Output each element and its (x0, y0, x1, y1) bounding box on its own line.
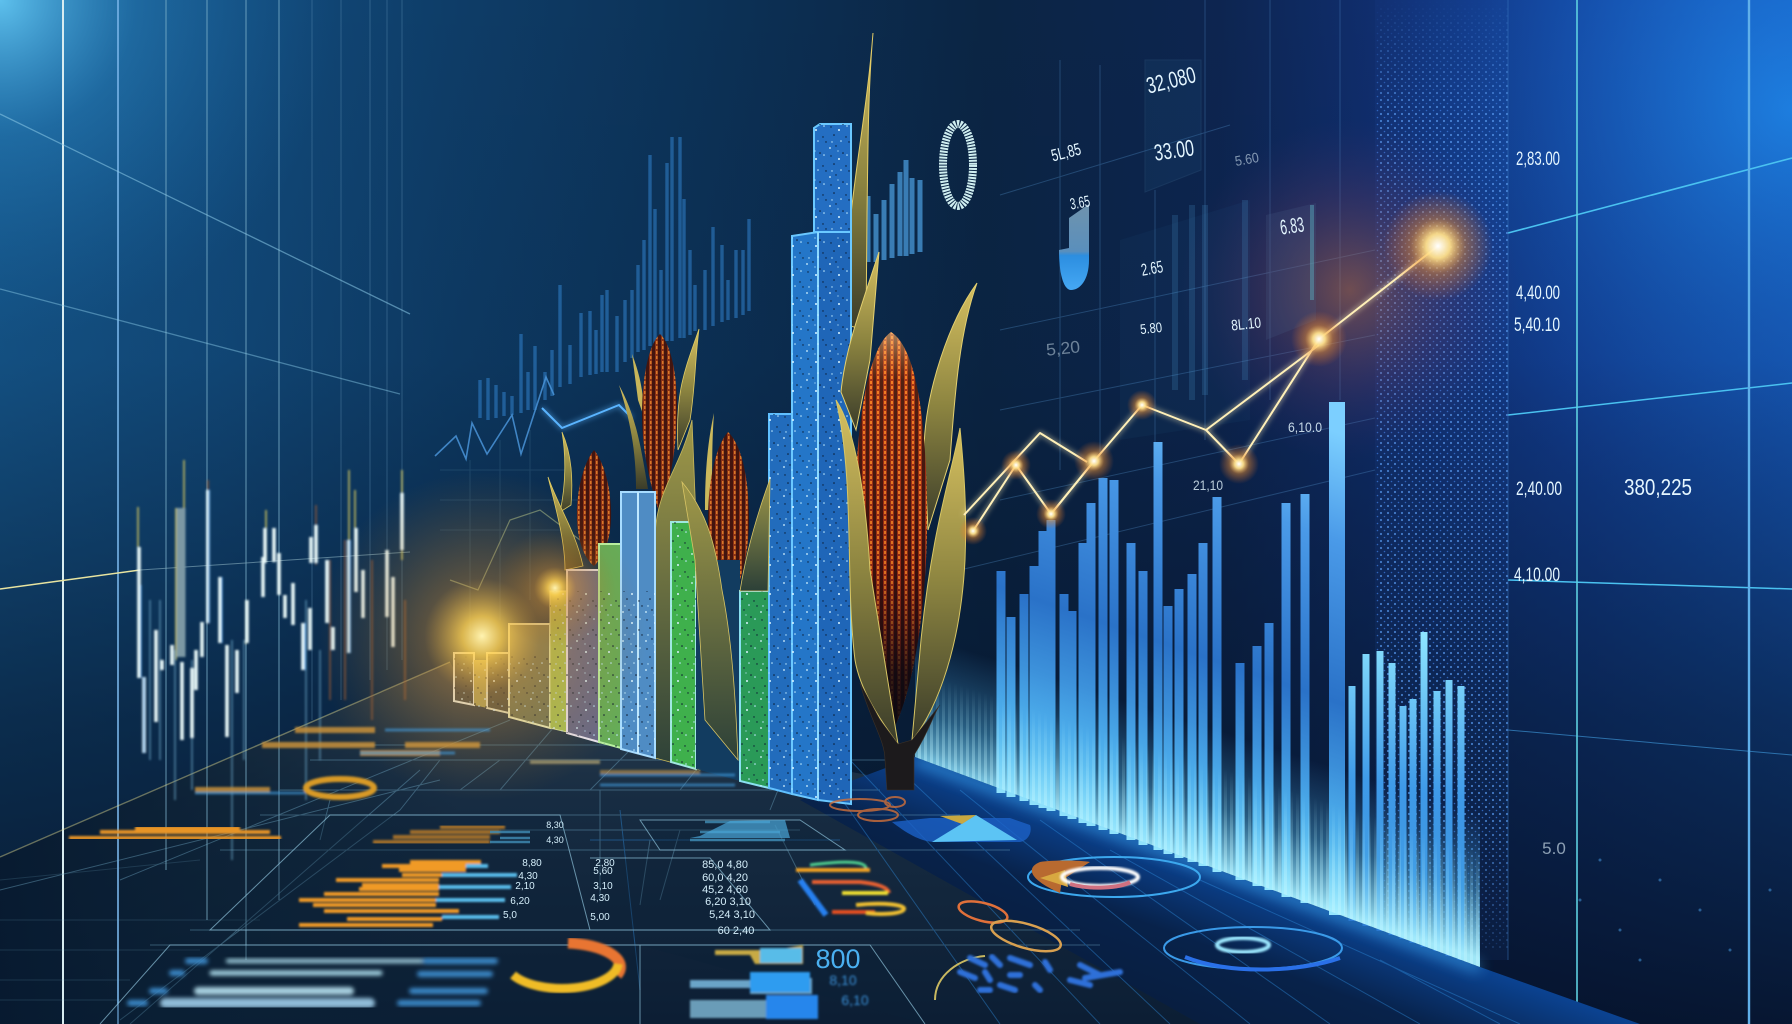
dot matrix column (1375, 0, 1508, 960)
corn cob (855, 332, 927, 734)
wall numbers: 4,10.00 (1514, 565, 1560, 586)
panel labels: 2,80 (595, 858, 615, 869)
panel labels: 6,20 3,10 (705, 896, 751, 908)
mid wall faint bar skyline (435, 137, 920, 640)
wall numbers: 21,10 (1193, 477, 1223, 493)
wall numbers: 5L,85 (1049, 140, 1083, 165)
panel labels: 45,2 4,60 (702, 884, 748, 896)
wall numbers: 3.65 (1069, 193, 1091, 214)
floor panel outlines (100, 815, 925, 1024)
panel labels: 6,20 (510, 896, 530, 907)
corn plants behind bars (548, 33, 873, 770)
wall numbers: 5.0 (1542, 839, 1566, 858)
brightest bar (1329, 402, 1345, 915)
yellow light glows (317, 471, 647, 801)
wall numbers: 33.00 (1152, 134, 1196, 166)
cyan stripe highlight (918, 689, 1479, 966)
pie with cyan triangle (892, 815, 1031, 842)
small corn cob C (705, 413, 749, 680)
orange ring cluster (830, 797, 905, 821)
distant floor bars (195, 730, 735, 797)
wall numbers: 380,225 (1624, 474, 1692, 500)
bottom right bars with numbers (690, 945, 818, 1019)
small blurred numbers: 8,10 (829, 972, 857, 988)
wall numbers: 5,40.10 (1514, 315, 1560, 336)
floor charts (69, 730, 925, 1024)
panel labels: 3,10 (593, 881, 613, 892)
mid corn leaves (682, 479, 770, 760)
wall numbers: 32,080 (1144, 61, 1198, 99)
wall numbers: 5.80 (1139, 319, 1163, 337)
wall numbers: 5.60 (1234, 149, 1260, 169)
wall numbers: 6,10.0 (1288, 419, 1322, 435)
particles on right floor (1578, 858, 1772, 962)
wall numbers: 5,20 (1045, 337, 1081, 360)
panel labels: 5,0 (503, 910, 517, 921)
blue bars centre (490, 822, 785, 842)
segmented ring chart (1028, 857, 1200, 897)
icon: blue gauge shield (1059, 204, 1089, 290)
blue disk chart (1164, 927, 1342, 970)
small blurred numbers (829, 972, 869, 1008)
orange floor bars centre (373, 827, 505, 842)
panel labels: 4,30 (546, 835, 564, 845)
figure eight rings (957, 897, 1064, 957)
panel labels: 5,60 (593, 866, 613, 877)
wall numbers (1045, 61, 1692, 858)
small corn cob B (619, 329, 699, 515)
panel labels: 4,30 (590, 893, 610, 904)
small blurred numbers: 6,10 (841, 992, 869, 1008)
panel labels: 8,30 (546, 820, 564, 830)
small area chart panel (690, 820, 790, 838)
back centre leaf (655, 420, 700, 770)
wall numbers: 2,40.00 (1516, 479, 1562, 500)
back leaves (841, 252, 879, 430)
blue bar chart on wall (915, 402, 1480, 968)
glow along wall base (915, 760, 1480, 968)
left wall grid lines (0, 0, 410, 1024)
panel labels: 5,00 (590, 912, 610, 923)
front right leaf (912, 428, 966, 740)
panel labels: 2,10 (515, 881, 535, 892)
front thin bars (1352, 632, 1461, 960)
sparkle texture (454, 124, 851, 804)
wall numbers: 4,40.00 (1516, 283, 1560, 304)
wall numbers: 2.65 (1140, 257, 1165, 280)
blue dot ring (935, 956, 1120, 1000)
big corn plant (836, 252, 977, 790)
coloured pill bars (796, 862, 904, 915)
small corn cob A (548, 432, 611, 570)
columns (454, 124, 851, 804)
donut gauge (513, 943, 620, 988)
panel labels: 5,24 3,10 (709, 909, 755, 921)
wall numbers: 8L.10 (1230, 314, 1262, 335)
floor left (0, 662, 1300, 1024)
panel labels (503, 820, 755, 937)
panel labels: 60,0 4,20 (702, 872, 748, 884)
icon: white ring gauge (943, 124, 973, 206)
panel labels: 4,30 (518, 871, 538, 882)
glowing column chart (454, 124, 851, 804)
orange floor bars left (69, 828, 281, 838)
panel labels: 8,80 (522, 858, 542, 869)
lower husk (860, 683, 940, 790)
main bars (1001, 442, 1305, 903)
candlestick chart (138, 460, 405, 860)
cob shading (855, 332, 927, 734)
panel labels: 60 2,40 (718, 925, 754, 937)
floor gauge (306, 779, 374, 797)
floor perspective grid (0, 662, 1520, 1024)
front left leaf (836, 400, 898, 744)
lines (964, 246, 1438, 531)
gold line chart with glowing nodes (959, 191, 1493, 545)
orange horizontal bar chart (299, 862, 517, 925)
wall numbers: 2,83.00 (1516, 149, 1560, 170)
wall numbers: 6.83 (1279, 213, 1306, 240)
red glow behind line chart (1180, 120, 1520, 460)
floor right (800, 757, 1640, 1024)
right wall grid lines (960, 0, 1792, 1024)
nodes (959, 191, 1493, 545)
panel labels: 85,0 4,80 (702, 859, 748, 871)
bottom left pale bars (130, 961, 495, 1003)
data panels on wall (1059, 60, 1316, 440)
number 800: 800 (815, 944, 861, 974)
dim bar band near floor (915, 620, 1480, 967)
floor pie charts (830, 797, 1342, 1000)
tall corn blade (850, 33, 873, 330)
